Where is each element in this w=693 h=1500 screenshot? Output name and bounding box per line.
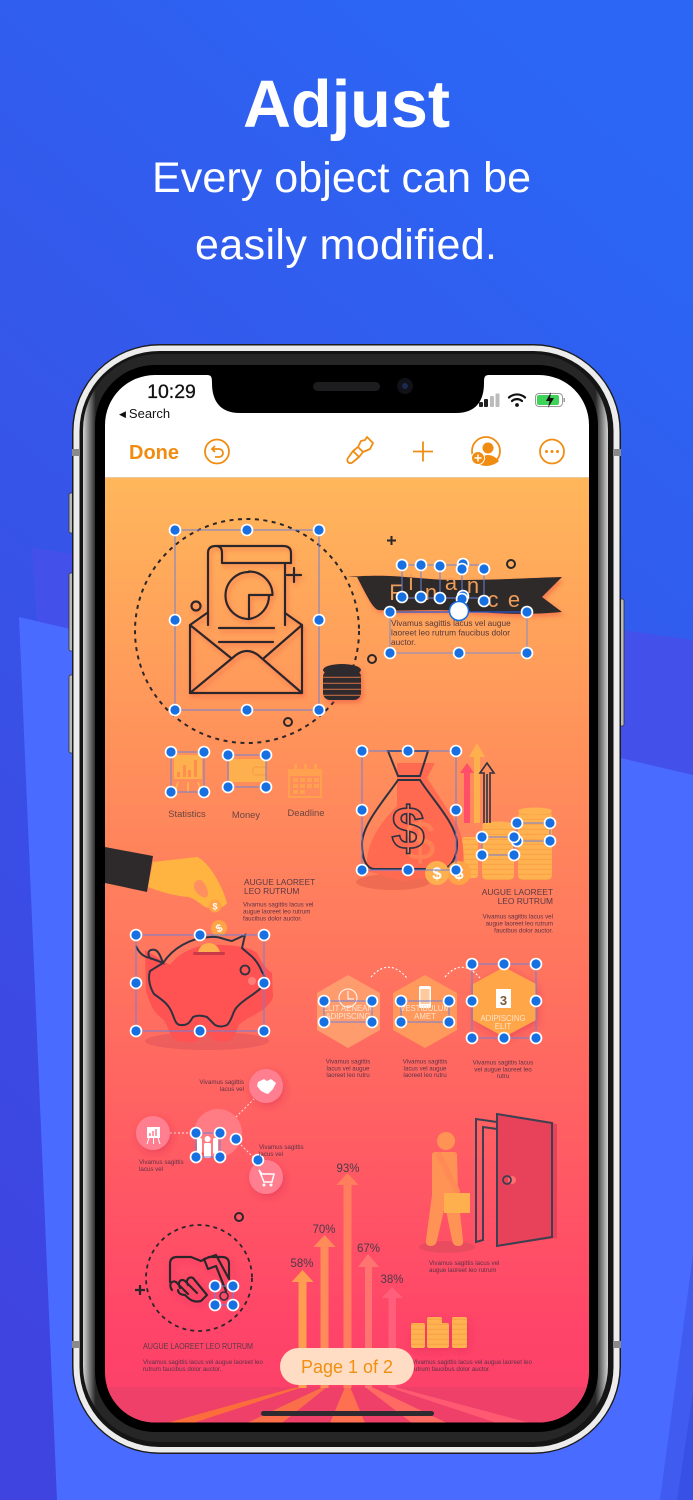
toolbar: paintbrush icon	[347, 437, 373, 463]
pig shadow	[145, 1032, 269, 1050]
hand heading	[244, 877, 315, 896]
hand heading: AUGUE LAOREET	[244, 877, 315, 887]
hexagon captions: Vivamus sagittis	[326, 1058, 370, 1066]
signal bars	[479, 394, 500, 407]
bag outline	[362, 751, 457, 869]
arrow bar chart	[290, 1163, 404, 1388]
pig outline	[136, 935, 264, 1026]
people network	[136, 1069, 304, 1194]
ribbon title letters: i	[409, 570, 413, 595]
camera	[397, 378, 413, 394]
calendar number icon	[496, 989, 511, 1008]
ribbon title letters: n	[425, 580, 437, 605]
calendar number icon: 3	[500, 993, 507, 1008]
hexagon captions: lacus vel augue	[326, 1066, 370, 1072]
phone frame	[69, 344, 624, 1454]
toolbar: more icon	[540, 440, 564, 464]
hexagon two	[393, 975, 457, 1048]
title: Adjust	[243, 67, 450, 142]
home indicator	[261, 1411, 434, 1416]
handshake badge	[135, 1213, 263, 1373]
briefcase	[444, 1193, 470, 1213]
faded dollar sign: $	[404, 809, 436, 872]
hexagon labels: AMET	[414, 1012, 436, 1021]
hexagon labels	[323, 1004, 526, 1031]
hexagon labels: ADIPISCING	[325, 1012, 371, 1021]
hexagon three	[473, 967, 536, 1037]
toolbar: add icon	[413, 442, 433, 462]
statistics icon	[174, 755, 202, 792]
outlined dollar sign: $	[391, 795, 425, 862]
hexagon captions: laoreet leo rutru	[403, 1072, 447, 1079]
coin slot	[193, 952, 225, 955]
node captions: Vivamus sagittis	[139, 1159, 184, 1166]
hexagon captions: Vivamus sagittis lacus	[473, 1060, 533, 1066]
selection handles: handshake	[209, 1280, 239, 1311]
pig fill	[145, 945, 273, 1042]
decoration plus	[387, 536, 396, 545]
toolbar: collaborate icon	[472, 437, 500, 466]
node captions	[139, 1079, 304, 1173]
toolbar: done button: Done	[129, 442, 179, 464]
ribbon letter boxes	[396, 558, 490, 607]
battery icon	[536, 392, 565, 408]
dashed arrows between hexagons	[371, 967, 480, 978]
coin stack dark	[323, 664, 361, 700]
ribbon title letters: a	[445, 570, 458, 595]
hand body text: augue laoreet leo rutrum	[243, 908, 310, 916]
handshake heading: AUGUE LAOREET LEO RUTRUM	[143, 1341, 253, 1351]
back to search: ◀	[119, 409, 126, 419]
phone notch	[205, 372, 490, 413]
phone screen	[105, 375, 589, 1427]
piggy bank	[130, 929, 273, 1050]
hexagon process	[317, 958, 542, 1080]
hand	[148, 857, 227, 908]
handshake icon	[170, 1255, 229, 1302]
ribbon title letters: n	[467, 573, 479, 598]
selection handles: bag and coins	[356, 745, 556, 876]
percent labels: 93%	[336, 1163, 360, 1175]
person arm	[439, 1155, 457, 1191]
arrow 67 percent	[358, 1254, 379, 1388]
wallet icon	[229, 759, 266, 782]
ribbon title letters: F	[389, 580, 403, 605]
bag fill	[367, 763, 464, 881]
decoration circle	[235, 1213, 243, 1221]
money label: Money	[232, 809, 260, 820]
hexagon one	[317, 975, 380, 1048]
coin in slot	[198, 943, 220, 954]
dollar coins: $	[454, 864, 464, 883]
hand dropping coin	[105, 847, 315, 936]
finance envelope illustration	[135, 519, 515, 743]
back to search: Search	[129, 406, 170, 421]
selection handles: icons	[165, 746, 272, 798]
wifi icon	[509, 394, 525, 406]
handshake body text	[143, 1359, 263, 1373]
bag shadow	[356, 874, 430, 890]
person and door illustration	[419, 1114, 557, 1274]
pig eye	[240, 966, 250, 974]
statistics label: Statistics	[168, 808, 206, 819]
arrow 93 percent	[336, 1173, 358, 1388]
ribbon title letters: e	[508, 587, 520, 612]
coin falling one: $	[212, 902, 218, 912]
node captions: lacus vel	[139, 1166, 163, 1173]
hexagon labels: ELIT	[495, 1022, 511, 1031]
hexagon captions: lacus vel augue	[404, 1066, 447, 1072]
selection handles: pig	[130, 929, 270, 1037]
ribbon title letters	[391, 574, 520, 607]
door panel	[497, 1115, 557, 1246]
envelope and report icon	[190, 546, 302, 693]
small icons row	[165, 746, 325, 820]
status bar time: 10:29	[147, 381, 196, 403]
phone icon	[419, 986, 431, 1008]
dashed circle	[135, 519, 359, 743]
small coin stacks	[411, 1317, 467, 1348]
hexagon labels: ADIPISCING	[480, 1014, 526, 1023]
hexagon labels: VESTIBULUM	[400, 1004, 450, 1013]
selection handles: people	[190, 1127, 264, 1166]
door outline	[476, 1114, 552, 1246]
decoration plus	[135, 1285, 145, 1295]
hand heading: LEO RUTRUM	[244, 886, 299, 896]
subtitle line two: easily modified.	[195, 221, 497, 269]
bag heading: LEO RUTRUM	[498, 896, 553, 906]
text box handles	[384, 602, 533, 659]
dashed ring	[146, 1225, 252, 1331]
sleeve	[105, 847, 153, 892]
hand body text	[243, 902, 313, 922]
page indicator pill: Page 1 of 2	[301, 1357, 393, 1377]
clock icon	[339, 989, 357, 1007]
ribbon body text: laoreet leo rutrum faucibus dolor	[391, 628, 510, 638]
ribbon title letters: c	[488, 587, 498, 612]
arrow 38 percent	[382, 1287, 403, 1388]
decoration circle three	[284, 718, 292, 726]
coin stacks	[462, 808, 552, 880]
subtitle line one: Every object can be	[152, 154, 531, 202]
bag body text	[483, 914, 553, 934]
selection handles: envelope	[169, 524, 325, 716]
dollar coins: $	[432, 864, 442, 883]
page indicator pill	[280, 1348, 414, 1385]
coin stack caption	[412, 1359, 532, 1373]
coin falling one	[208, 900, 222, 912]
door knob	[503, 1176, 516, 1184]
percent labels: 38%	[380, 1274, 404, 1286]
ribbon shape	[347, 576, 562, 614]
node captions: Vivamus sagittis	[259, 1144, 304, 1151]
coin falling two	[211, 920, 227, 936]
handshake body text: Vivamus sagittis lacus vel augue laoreet leo	[143, 1359, 263, 1366]
node captions: lacus vel	[259, 1151, 283, 1158]
finger gap	[194, 880, 208, 898]
pig cheek	[248, 977, 256, 985]
cart node	[249, 1160, 283, 1194]
person	[426, 1132, 463, 1246]
ribbon body text	[391, 620, 510, 645]
decoration circle two	[368, 655, 376, 663]
arrow 70 percent	[314, 1235, 336, 1388]
coin stack caption: Vivamus sagittis lacus vel augue laoreet leo	[412, 1359, 532, 1366]
dotted connectors	[170, 1099, 257, 1161]
coin falling two: $	[214, 922, 225, 936]
centre circle	[194, 1109, 242, 1157]
dollar coins	[425, 861, 471, 885]
ribbon body text: auctor.	[391, 637, 416, 647]
hexagon captions: vel augue laoreet leo	[474, 1066, 532, 1074]
hand body text: faucibus dolor auctor.	[243, 916, 302, 922]
bag body text: augue laoreet leo rutrum	[486, 920, 553, 928]
percent labels: 58%	[290, 1258, 314, 1270]
percent labels: 70%	[312, 1224, 336, 1236]
finance ribbon banner	[347, 558, 562, 659]
door caption	[429, 1260, 499, 1274]
arrow 58 percent	[292, 1270, 314, 1388]
bag heading	[482, 887, 553, 906]
hexagon captions: laoreet leo rutru	[326, 1072, 370, 1079]
speaker	[313, 382, 380, 391]
decoration circle one	[507, 560, 515, 568]
calendar icon	[289, 764, 321, 797]
floor shadow	[419, 1241, 475, 1253]
percent labels: 67%	[357, 1243, 380, 1255]
ribbon body text: Vivamus sagittis lacus vel augue	[391, 618, 511, 628]
money bag illustration	[356, 743, 556, 934]
node captions: Vivamus sagittis	[199, 1079, 244, 1086]
handshake body text: rutrum faucibus dolor auctor.	[143, 1366, 222, 1373]
growth arrows	[460, 743, 494, 823]
selection handles: hexagons	[318, 958, 542, 1044]
coin stack caption: rutrum faucibus dolor auctor.	[412, 1366, 491, 1373]
hexagon captions: Vivamus sagittis	[403, 1058, 447, 1066]
chart node	[136, 1116, 170, 1150]
bag body text: faucibus dolor auctor.	[494, 928, 553, 934]
handshake node	[249, 1069, 283, 1103]
hexagon labels: ELIT AENEAN	[323, 1004, 373, 1013]
node captions: lacus vel	[220, 1086, 244, 1093]
bag body text: Vivamus sagittis lacus vel	[483, 914, 553, 920]
door caption: augue laoreet leo rutrum	[429, 1267, 496, 1274]
percent labels	[290, 1163, 404, 1286]
hexagon captions	[326, 1058, 533, 1080]
people icon	[197, 1136, 218, 1158]
hand body text: Vivamus sagittis lacus vel	[243, 902, 313, 908]
hexagon captions: rutru	[497, 1073, 510, 1080]
bag heading: AUGUE LAOREET	[482, 887, 553, 897]
deadline label: Deadline	[287, 807, 325, 818]
rays below arrows	[167, 1387, 530, 1423]
door caption: Vivamus sagittis lacus vel	[429, 1260, 499, 1267]
toolbar: undo icon	[205, 440, 229, 464]
